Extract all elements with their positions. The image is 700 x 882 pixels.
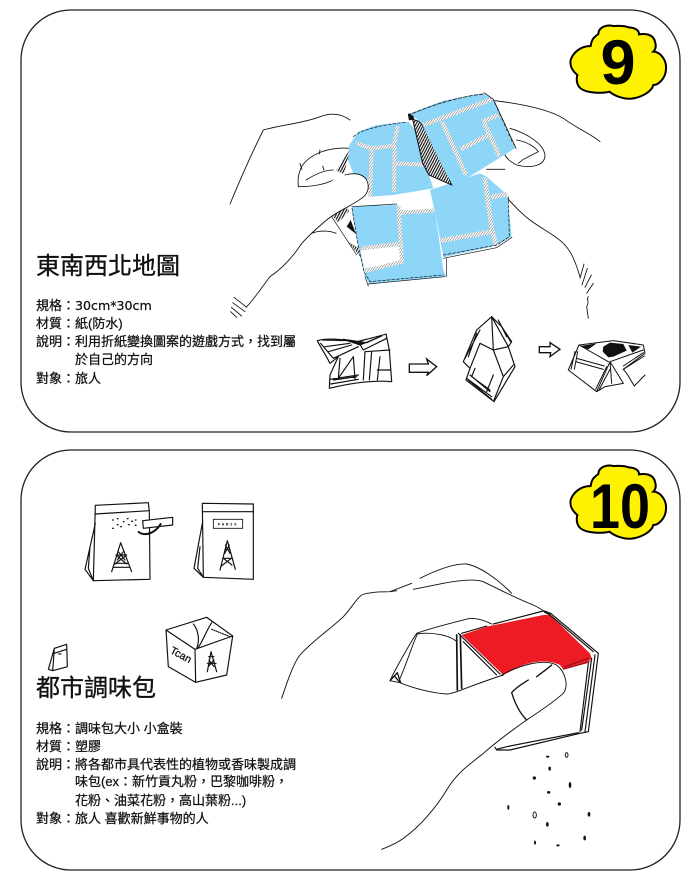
text: folding paper map specification	[36, 298, 296, 386]
text: city seasoning pack specification: 說明：將各都市具代表性的植物或香味製成調	[36, 757, 296, 772]
sketch: small pack	[48, 644, 67, 671]
title: city seasoning pack: 都市調味包	[36, 675, 156, 702]
badge: number 10 cloud: 10	[590, 472, 650, 542]
badge: number 9 cloud: 9	[600, 28, 636, 98]
pack sketches: PARIS	[218, 523, 238, 527]
arrow: first step	[409, 359, 437, 376]
sketch: unfolded paper	[317, 334, 392, 388]
sketch: seasoning box	[166, 617, 233, 682]
text: folding paper map specification: 說明：利用折紙變換圖案的遊戲方式，找到屬	[36, 334, 296, 349]
sketch: folded paper	[463, 317, 515, 402]
paper: lower right panel	[430, 173, 512, 277]
badge: number 10 cloud	[570, 466, 666, 542]
text: city seasoning pack specification: 味包(ex：新竹貢丸粉，巴黎咖啡粉，	[75, 774, 288, 789]
text: folding paper map specification: 材質：紙(防水)	[36, 316, 123, 331]
pack sketches	[48, 503, 253, 682]
sketch: opened fortune teller	[568, 341, 645, 392]
sketch: bag with seasoning strip	[85, 503, 173, 581]
illustration: hands folding blue paper map	[230, 93, 600, 318]
text: folding paper map specification: 對象：旅人	[36, 371, 101, 386]
sketch: bag with label	[194, 503, 253, 579]
seasoning grains	[507, 753, 590, 846]
illustration: hand sprinkling seasoning from red box	[282, 564, 598, 849]
text: folding paper map specification: 規格：30cm*30cm	[36, 298, 152, 313]
paper: top right folded flap	[408, 93, 516, 187]
paper: bottom panel	[332, 191, 446, 286]
title: folding paper map: 東南西北地圖	[36, 253, 180, 280]
folding steps sketches	[317, 317, 645, 402]
text: city seasoning pack specification: 花粉、油菜花粉，高山葉粉...)	[75, 793, 246, 808]
text: folding paper map specification: 於自己的方向	[75, 352, 153, 367]
text: city seasoning pack specification	[36, 721, 296, 826]
text: city seasoning pack specification: 對象：旅人 喜歡新鮮事物的人	[36, 811, 209, 826]
text: city seasoning pack specification: 材質：塑膠	[36, 739, 101, 754]
pack sketches: Tcan	[168, 645, 193, 666]
paper: top left panel	[336, 122, 433, 197]
arrow: second step	[539, 343, 560, 357]
red box top	[462, 615, 592, 675]
badge: number 9 cloud	[570, 26, 666, 99]
text: city seasoning pack specification: 規格：調味包大小 小盒裝	[36, 721, 183, 736]
hand: left thumb over paper	[297, 174, 368, 247]
panel: city seasoning pack	[21, 450, 680, 870]
